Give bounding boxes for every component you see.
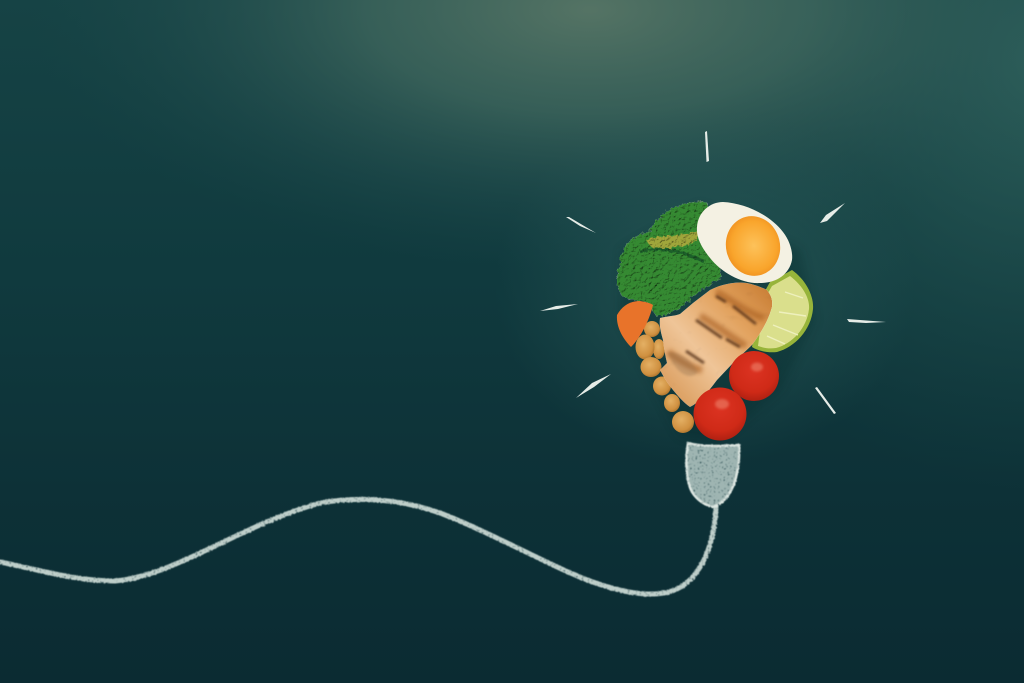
icon: grilled chicken [660, 282, 772, 407]
food bulb [617, 202, 815, 440]
icon: chickpeas [636, 321, 694, 433]
ray lower right [815, 387, 836, 414]
ray upper right [820, 203, 845, 223]
ray right [847, 319, 886, 323]
chalk light rays [540, 131, 886, 414]
icon: boiled egg half [697, 202, 792, 283]
icon: cherry tomato right [729, 351, 779, 401]
icon: broccoli [617, 202, 722, 317]
chalk bulb socket [686, 443, 739, 507]
icon: cherry tomato bottom [694, 388, 746, 440]
icon: carrot slice [617, 301, 653, 347]
ray lower left [576, 374, 611, 398]
shadow under food [620, 205, 815, 440]
ray left [540, 304, 578, 311]
chalk cord [0, 499, 716, 594]
ray upper left [566, 217, 596, 233]
ray top [705, 131, 709, 162]
icon: lime wedge [752, 270, 813, 352]
